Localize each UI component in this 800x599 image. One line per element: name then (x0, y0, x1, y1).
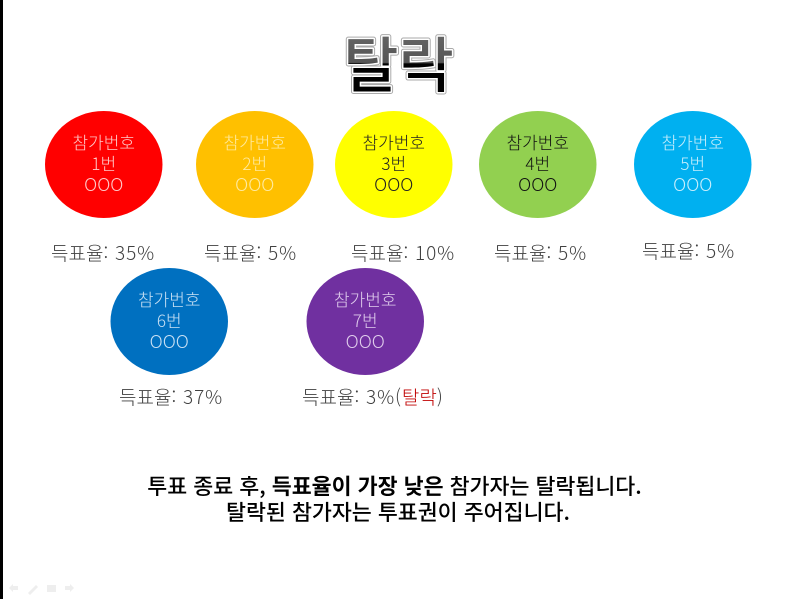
candidate 5: 5번 (680, 150, 705, 175)
candidate 4: 참가번호 (506, 129, 569, 154)
candidate 5: 참가번호 (661, 129, 724, 154)
candidate 5: OOO (673, 171, 712, 197)
vote share 3: 득표율: 10% (351, 239, 455, 266)
candidate 6: 6번 (157, 307, 182, 332)
candidate 1: 참가번호 (72, 129, 135, 154)
title: 탈락 (343, 18, 454, 105)
candidate 4 (479, 111, 596, 218)
vote share 1: 득표율: 35% (51, 239, 155, 266)
candidate 2: OOO (235, 171, 274, 197)
candidate 7 (306, 268, 424, 375)
candidate 2: 참가번호 (223, 129, 286, 154)
vote share 4: 득표율: 5% (494, 239, 587, 266)
candidate 2: 2번 (242, 150, 267, 175)
title: 탈락 (343, 18, 454, 105)
candidate 6: OOO (150, 328, 189, 354)
explanation text: 탈락된 참가자는 투표권이 주어집니다. (226, 496, 570, 527)
candidate 4: 4번 (525, 150, 550, 175)
candidate 6 (110, 268, 228, 375)
candidate 7: 7번 (353, 307, 378, 332)
candidate 3: 참가번호 (362, 129, 425, 154)
explanation text: 투표 종료 후, 득표율이 가장 낮은 참가자는 탈락됩니다. (147, 470, 642, 501)
left window edge (0, 0, 3, 599)
faint slideshow controls (9, 584, 74, 595)
candidate 3: 3번 (381, 150, 406, 175)
candidate 7: OOO (346, 328, 385, 354)
candidate 5 (634, 111, 752, 218)
candidate 7: 참가번호 (334, 286, 397, 311)
explanation text (147, 470, 642, 527)
vote share 2: 득표율: 5% (204, 239, 297, 266)
candidate 3: OOO (374, 171, 413, 197)
candidate 4: OOO (518, 171, 557, 197)
candidate 1 (45, 111, 162, 218)
vote share 5: 득표율: 5% (642, 237, 735, 264)
candidate 2 (196, 111, 314, 218)
vote share 7: 득표율: 3%(탈락) (302, 383, 443, 410)
candidate 3 (335, 111, 452, 218)
vote share 6: 득표율: 37% (119, 383, 223, 410)
title: 탈락 (343, 18, 454, 105)
candidate 1: 1번 (91, 150, 116, 175)
candidate 6: 참가번호 (138, 286, 201, 311)
candidate 1: OOO (84, 171, 123, 197)
